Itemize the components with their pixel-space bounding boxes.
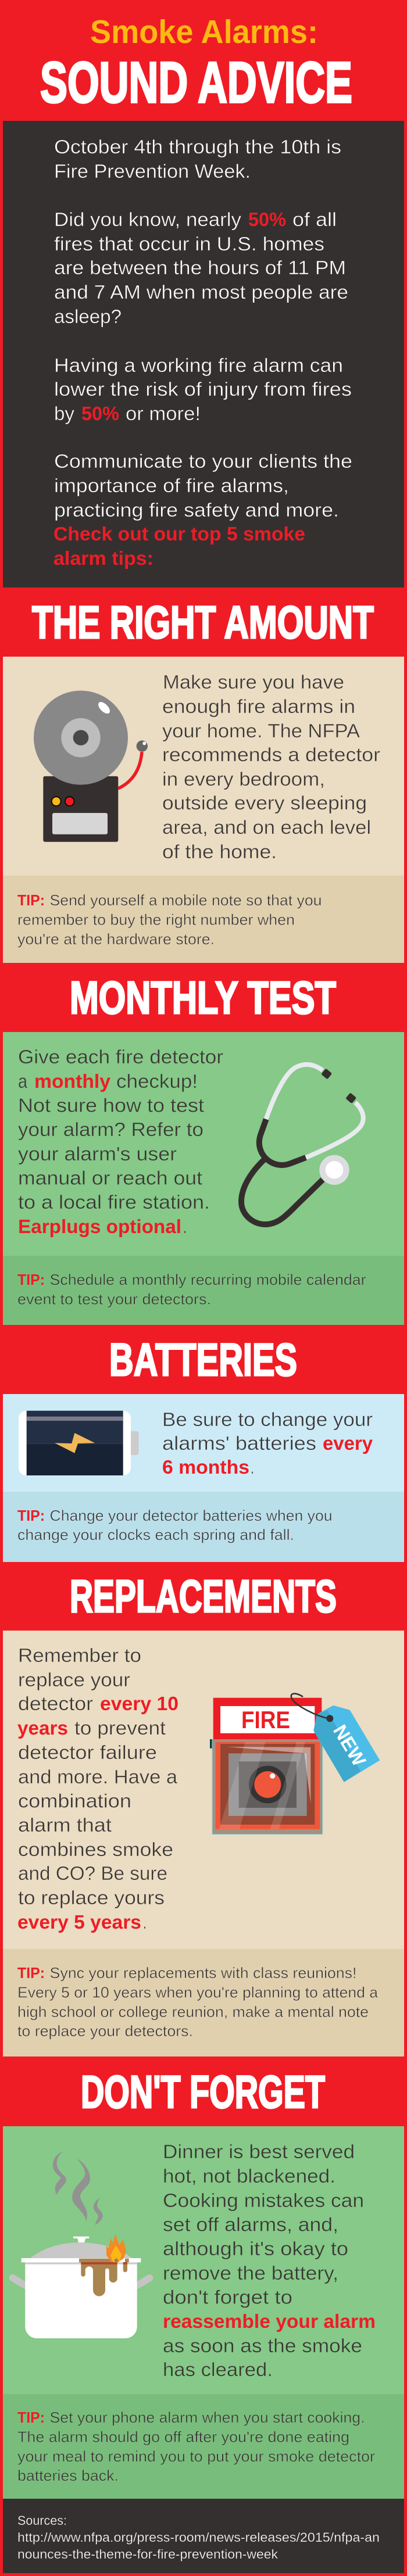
panel: don't forget	[3, 2126, 404, 2499]
body text: area, and on each level	[162, 816, 371, 838]
intro text: by	[54, 403, 74, 424]
body text: Not sure how to test	[18, 1095, 204, 1116]
intro text: Fire Prevention Week.	[54, 160, 251, 182]
body text: .	[143, 1911, 147, 1933]
icon: fire alarm bell	[34, 690, 148, 842]
body text: although it's okay to	[163, 2238, 348, 2259]
sources text: nounces-the-theme-for-fire-prevention-week	[17, 2547, 279, 2561]
body text	[163, 2141, 376, 2380]
body text: Dinner is best served	[163, 2141, 355, 2162]
icon: battery	[19, 1411, 139, 1475]
body text: combination	[18, 1790, 131, 1812]
body text: Cooking mistakes can	[163, 2190, 364, 2211]
intro text: are between the hours of 11 PM	[54, 257, 346, 278]
body text: replace your	[18, 1669, 130, 1690]
intro text: Communicate to your clients the	[54, 450, 352, 472]
body text: to prevent	[74, 1717, 166, 1739]
sources text: Sources:	[17, 2513, 67, 2528]
body text: every	[323, 1432, 373, 1454]
body text: of the home.	[162, 841, 277, 862]
body text: a	[18, 1070, 28, 1092]
tip	[17, 891, 322, 948]
body text: Earplugs optional	[18, 1216, 181, 1237]
intro text: asleep?	[54, 306, 122, 327]
body text	[162, 671, 380, 862]
tip: Set your phone alarm when you start cooking.	[50, 2409, 365, 2426]
panel: replacements	[3, 1631, 404, 2056]
body text: combines smoke	[18, 1839, 173, 1860]
intro text: practicing fire safety and more.	[54, 499, 339, 521]
intro text: of all	[292, 209, 337, 230]
body text: Give each fire detector	[18, 1046, 223, 1067]
body text: don't forget to	[163, 2286, 292, 2308]
body text: reassemble your alarm	[163, 2310, 376, 2332]
body text: hot, not blackened.	[163, 2165, 335, 2187]
body text: 6 months	[162, 1456, 249, 1478]
tip: event to test your detectors.	[17, 1290, 211, 1307]
body text: as soon as the smoke	[163, 2335, 362, 2356]
body text: and more. Have a	[18, 1766, 178, 1787]
intro text: fires that occur in U.S. homes	[54, 233, 324, 255]
body text: monthly	[34, 1070, 111, 1092]
panel: introduction	[3, 121, 404, 587]
tip: Change your detector batteries when you	[50, 1507, 333, 1524]
tip: TIP:	[17, 1507, 45, 1524]
body text: years	[17, 1717, 68, 1739]
title: Smoke Alarms: Smoke Alarms:	[90, 13, 318, 51]
body text: Make sure you have	[163, 671, 344, 693]
body text: recommends a detector	[162, 744, 380, 765]
icon: smoking pot	[13, 2151, 149, 2338]
tip	[17, 2409, 375, 2484]
body text: to a local fire station.	[18, 1191, 210, 1213]
intro text: 50%	[248, 209, 286, 230]
body text: to replace yours	[18, 1887, 165, 1908]
body text: outside every sleeping	[162, 792, 367, 814]
tip: Every 5 or 10 years when you're planning to attend a	[17, 1984, 379, 2001]
intro text: lower the risk of injury from fires	[54, 378, 352, 400]
panel: monthly test	[3, 1032, 404, 1325]
intro text: or more!	[126, 403, 201, 424]
body text: .	[183, 1216, 187, 1237]
intro text: 50%	[81, 403, 119, 424]
body text: enough fire alarms in	[162, 696, 355, 717]
tip: to replace your detectors.	[17, 2022, 193, 2040]
body text	[17, 1645, 178, 1933]
tip: TIP:	[17, 1271, 45, 1288]
intro text: October 4th through the 10th is	[54, 136, 341, 157]
tip: change your clocks each spring and fall.	[17, 1526, 294, 1543]
title block	[40, 13, 352, 114]
body text: in every bedroom,	[162, 768, 325, 790]
body text: your alarm's user	[18, 1143, 177, 1165]
tip	[17, 1507, 333, 1543]
icon: new fire alarm box with tag	[210, 1694, 380, 1835]
intro text: and 7 AM when most people are	[54, 281, 348, 303]
intro text: alarm tips:	[53, 547, 153, 569]
body text: detector failure	[18, 1742, 157, 1763]
body text: remove the battery,	[163, 2262, 338, 2284]
body text: Remember to	[18, 1645, 141, 1666]
tip: batteries back.	[17, 2467, 119, 2484]
body text	[18, 1046, 223, 1237]
body text: .	[251, 1456, 254, 1478]
body text: every 5 years	[17, 1911, 141, 1933]
body text: and CO? Be sure	[18, 1862, 167, 1884]
body text: alarm that	[18, 1814, 112, 1836]
body text: checkup!	[116, 1070, 198, 1092]
tip: TIP:	[17, 1964, 45, 1982]
tip: remember to buy the right number when	[17, 911, 295, 929]
panel: the right amount	[3, 657, 404, 963]
intro text: Having a working fire alarm can	[54, 354, 343, 376]
body text: your home. The NFPA	[162, 720, 360, 741]
sources text	[17, 2513, 380, 2561]
tip: Schedule a monthly recurring mobile calendar	[50, 1271, 366, 1288]
label: FIRE: FIRE	[241, 1706, 290, 1733]
tip: TIP:	[17, 2409, 45, 2426]
body text	[162, 1409, 373, 1478]
tip: high school or college reunion, make a mental note	[17, 2003, 369, 2020]
tip: you're at the hardware store.	[17, 930, 215, 948]
intro text: Did you know, nearly	[54, 209, 242, 230]
tip: The alarm should go off after you're done eating	[17, 2428, 349, 2445]
label: NEW: NEW	[329, 1721, 370, 1770]
body text: has cleared.	[163, 2359, 273, 2380]
intro text: Check out our top 5 smoke	[53, 523, 305, 544]
tip	[17, 1964, 379, 2040]
tip: Sync your replacements with class reunions!	[50, 1964, 357, 1982]
body text: your alarm? Refer to	[18, 1119, 204, 1140]
tip	[17, 1271, 366, 1307]
tip: your meal to remind you to put your smoke detector	[17, 2448, 375, 2465]
tip: TIP:	[17, 891, 45, 909]
sources text: http://www.nfpa.org/press-room/news-releases/2015/nfpa-an	[17, 2530, 380, 2545]
panel: batteries	[3, 1394, 404, 1562]
body text: set off alarms, and,	[163, 2214, 338, 2235]
intro text: importance of fire alarms,	[54, 475, 289, 496]
body text: detector	[18, 1693, 93, 1714]
tip: Send yourself a mobile note so that you	[50, 891, 322, 909]
body text: alarms' batteries	[162, 1432, 316, 1454]
panel: sources	[3, 2499, 404, 2573]
body text: manual or reach out	[18, 1167, 202, 1189]
heading: Batteries: BATTERIES	[109, 1334, 297, 1385]
intro text	[53, 136, 352, 569]
body text: Be sure to change your	[162, 1409, 373, 1430]
body text: every 10	[100, 1693, 178, 1714]
icon: stethoscope	[241, 1065, 363, 1224]
